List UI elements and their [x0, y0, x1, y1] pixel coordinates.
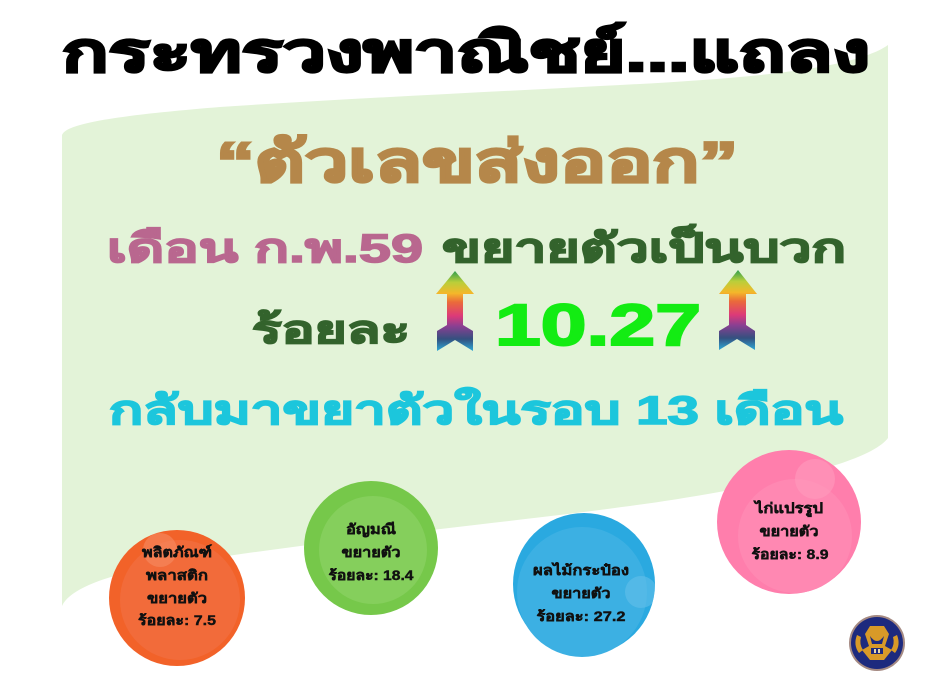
- bubble: gems and jewellery: [304, 481, 438, 615]
- subheading: growth positive: ขยายตัวเป็นบวก: [442, 223, 846, 271]
- bubble: canned fruit: ขยายตัว: [552, 585, 611, 601]
- icon: ministry of commerce seal: [849, 615, 905, 671]
- background panel: pale green ribbon: [62, 45, 888, 606]
- bubble: plastic products: [109, 530, 245, 666]
- bubble: plastic products: ร้อยละ: 7.5: [138, 612, 216, 628]
- statement: rebound in 13 months: กลับมาขยาตัวในรอบ 13 เดือน: [109, 387, 843, 433]
- icon: left rainbow up arrow: [436, 271, 474, 351]
- heading: export figures: “ตัวเลขส่งออก”: [216, 130, 738, 193]
- subheading: month: เดือน ก.พ.59: [107, 227, 423, 271]
- bubble: plastic products: พลาสติก: [146, 567, 208, 583]
- bubble: canned fruit: [513, 513, 657, 657]
- bubble: canned fruit: ร้อยละ: 27.2: [536, 608, 626, 624]
- icon: right rainbow up arrow: [719, 270, 757, 350]
- label: percent: ร้อยละ: [252, 309, 410, 352]
- bubble: plastic products: พลิตภัณฑ์: [142, 544, 212, 560]
- key figure: 10.27: 10.27: [495, 293, 701, 358]
- bubble: gems and jewellery: ร้อยละ: 18.4: [328, 567, 414, 583]
- bubble: canned fruit: ผลไม้กระป๋อง: [533, 561, 629, 578]
- bubble: processed chicken: ร้อยละ: 8.9: [752, 546, 829, 562]
- bubble: gems and jewellery: ขยายตัว: [342, 544, 401, 560]
- bubble: gems and jewellery: อัญมณี: [346, 521, 396, 538]
- bubble: processed chicken: ขยายตัว: [760, 523, 819, 539]
- bubble: processed chicken: [717, 450, 861, 594]
- bubble: processed chicken: ไก่แปรรูป: [753, 499, 823, 517]
- bubble: plastic products: ขยายตัว: [147, 590, 207, 606]
- title: กระทรวงพาณิชย์...แถลง: [62, 22, 870, 83]
